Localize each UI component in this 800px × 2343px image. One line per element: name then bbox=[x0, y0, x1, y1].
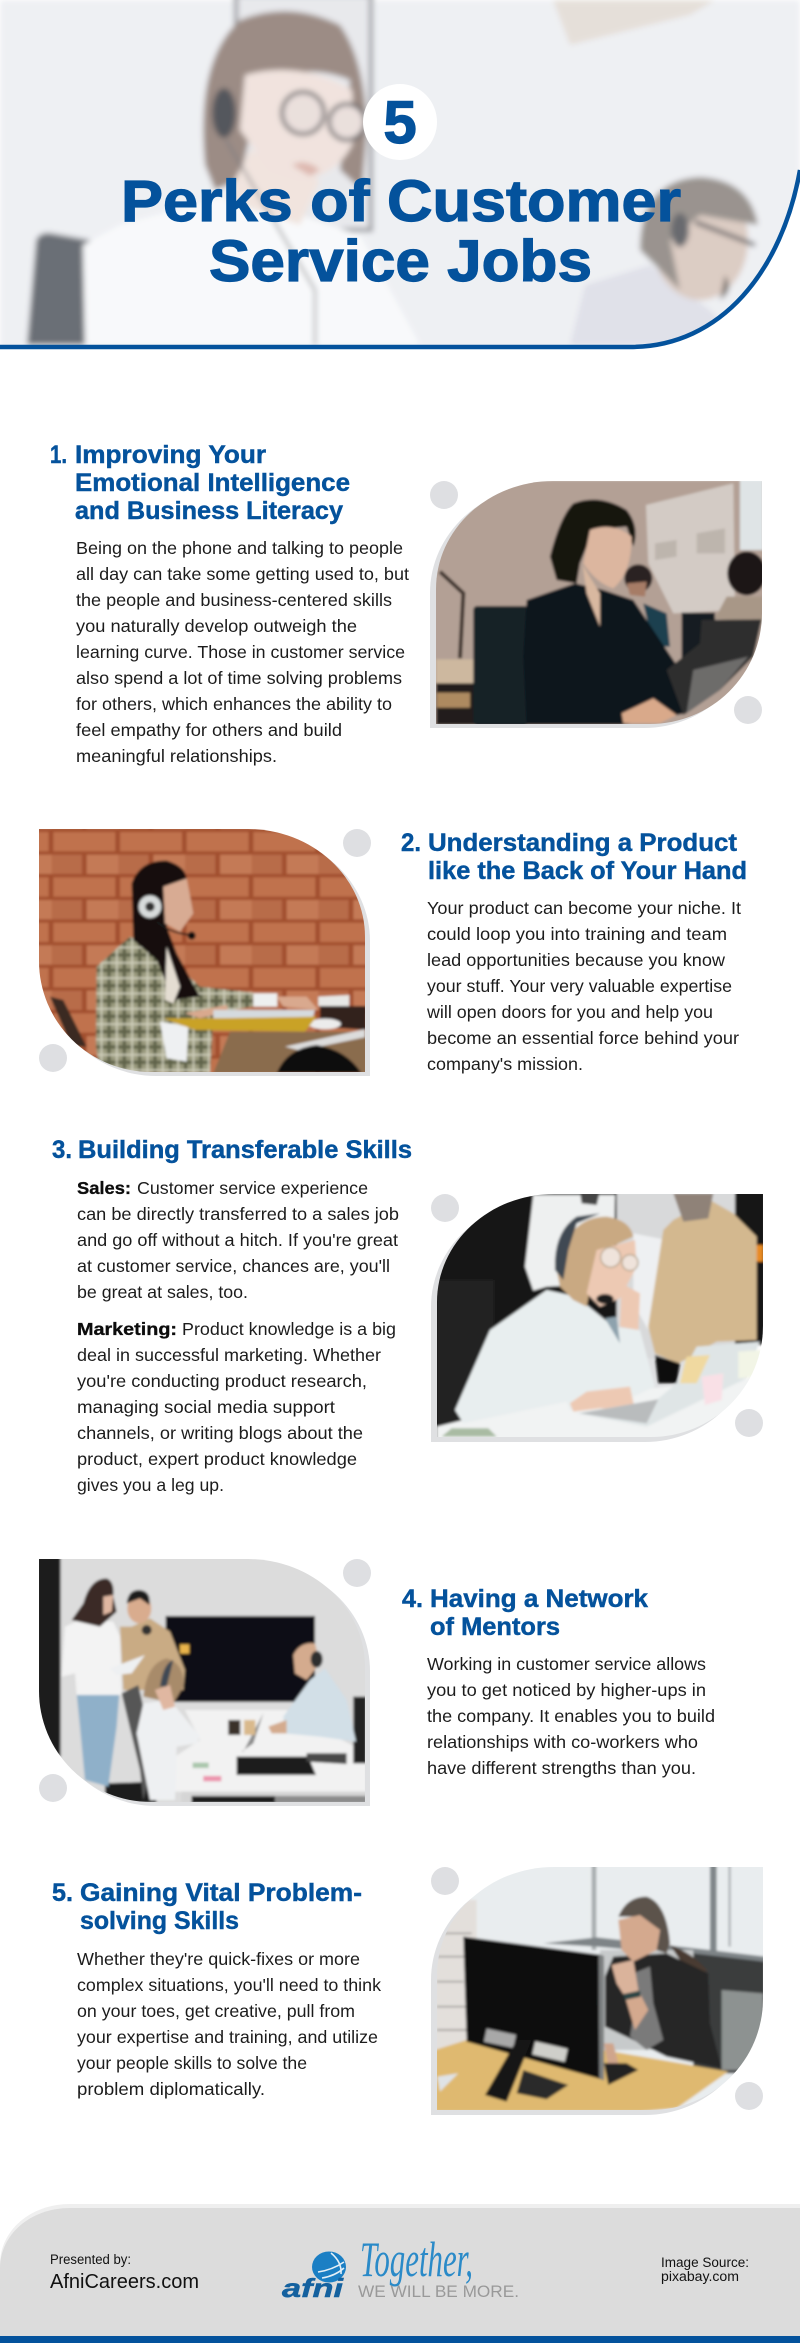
decorative dots bbox=[430, 481, 762, 724]
photo 1: agent at laptop bbox=[430, 480, 767, 728]
body text: marketing: gives you a leg up. bbox=[77, 1475, 224, 1495]
body text 2: will open doors for you and help you bbox=[426, 1002, 713, 1022]
photo 5: agent at monitor bbox=[431, 1863, 767, 2115]
globe mark bbox=[312, 2252, 346, 2282]
body text 4: you to get noticed by higher-ups in bbox=[427, 1680, 706, 1700]
image source: pixabay.com bbox=[661, 2269, 739, 2284]
number badge: 5 bbox=[383, 89, 417, 156]
image source bbox=[661, 2255, 749, 2284]
body text: sales: be great at sales, too. bbox=[77, 1282, 248, 1302]
heading 4: Having a Network bbox=[430, 1585, 648, 1613]
body text 4: the company. It enables you to build bbox=[427, 1706, 715, 1726]
body text: sales bbox=[77, 1178, 399, 1302]
section 5 bbox=[52, 1863, 767, 2115]
body text 2: Your product can become your niche. It bbox=[427, 898, 741, 918]
heading 5: 5. bbox=[52, 1879, 73, 1907]
presented by bbox=[50, 2252, 199, 2293]
body text 1: also spend a lot of time solving problems bbox=[76, 668, 402, 688]
decorative dots bbox=[431, 1867, 763, 2110]
heading 2: Understanding a Product bbox=[428, 829, 738, 857]
body text 1: meaningful relationships. bbox=[76, 746, 277, 766]
heading 1: and Business Literacy bbox=[75, 497, 343, 525]
body text: marketing: Product knowledge is a big bbox=[182, 1319, 396, 1339]
heading 5: solving Skills bbox=[80, 1907, 239, 1935]
heading 1: 1. bbox=[50, 441, 67, 469]
photo 2: agent at brick wall bbox=[33, 827, 371, 1077]
body text: marketing: managing social media support bbox=[77, 1397, 335, 1417]
footer bbox=[0, 2204, 800, 2343]
body text 1: feel empathy for others and build bbox=[76, 720, 342, 740]
body text 2: could loop you into training and team bbox=[427, 924, 727, 944]
section 2 bbox=[33, 827, 747, 1077]
presented by: AfniCareers.com bbox=[50, 2271, 199, 2293]
afni logo: Together, bbox=[360, 2231, 473, 2287]
body text 5 bbox=[77, 1949, 381, 2099]
body text 1: for others, which enhances the ability to bbox=[76, 694, 392, 714]
body text 2: company's mission. bbox=[427, 1054, 583, 1074]
heading 5: Gaining Vital Problem- bbox=[80, 1879, 362, 1907]
image source: Image Source: bbox=[661, 2255, 749, 2270]
section 1 bbox=[50, 441, 767, 766]
body text 5: on your toes, get creative, pull from bbox=[77, 2001, 355, 2021]
body text 4: Working in customer service allows bbox=[427, 1654, 706, 1674]
number badge bbox=[363, 84, 437, 160]
body text 5: Whether they're quick-fixes or more bbox=[77, 1949, 360, 1969]
decorative dots bbox=[431, 1194, 763, 1437]
body text 1: you naturally develop outweigh the bbox=[76, 616, 357, 636]
heading 4: of Mentors bbox=[430, 1613, 560, 1641]
body text 5: your people skills to solve the bbox=[77, 2053, 307, 2073]
body text 1: all day can take some getting used to, but bbox=[76, 564, 409, 584]
body text 1: the people and business-centered skills bbox=[76, 590, 392, 610]
body text 2: become an essential force behind your bbox=[427, 1028, 739, 1048]
body text 1: Being on the phone and talking to people bbox=[76, 538, 403, 558]
body text 1: learning curve. Those in customer service bbox=[76, 642, 405, 662]
body text: sales: Customer service experience bbox=[137, 1178, 368, 1198]
section 4 bbox=[33, 1557, 715, 1807]
body text: marketing: channels, or writing blogs about the bbox=[77, 1423, 363, 1443]
presented by: Presented by: bbox=[50, 2252, 131, 2267]
body text 1 bbox=[76, 538, 409, 766]
heading 1: Improving Your bbox=[75, 441, 266, 469]
photo 3: agent in white shirt bbox=[431, 1192, 765, 1447]
footer panel bbox=[0, 2204, 800, 2343]
heading 3: Building Transferable Skills bbox=[78, 1136, 412, 1164]
heading 1: Emotional Intelligence bbox=[75, 469, 350, 497]
title bbox=[121, 169, 681, 294]
heading 2 bbox=[401, 829, 747, 885]
title: Service Jobs bbox=[209, 229, 592, 294]
body text 2: lead opportunities because you know bbox=[427, 950, 725, 970]
body text 4: relationships with co-workers who bbox=[427, 1732, 698, 1752]
body text 2: your stuff. Your very valuable expertise bbox=[427, 976, 732, 996]
body text 2 bbox=[426, 898, 741, 1074]
heading 4: 4. bbox=[402, 1585, 423, 1613]
body text: marketing: Marketing: bbox=[77, 1319, 177, 1339]
body text: marketing: you're conducting product research, bbox=[77, 1371, 367, 1391]
body text: sales: at customer service, chances are, you'll bbox=[77, 1256, 390, 1276]
heading 4 bbox=[402, 1585, 648, 1641]
afni logo: afni bbox=[282, 2273, 344, 2303]
afni logo: WE WILL BE MORE. bbox=[358, 2282, 519, 2301]
heading 2: like the Back of Your Hand bbox=[428, 857, 747, 885]
heading 1 bbox=[50, 441, 350, 525]
decorative dots bbox=[39, 1559, 371, 1802]
heading 3: 3. bbox=[52, 1136, 72, 1164]
body text 5: your expertise and training, and utilize bbox=[77, 2027, 378, 2047]
curved blue rule bbox=[0, 170, 800, 347]
body text: sales: can be directly transferred to a sales job bbox=[77, 1204, 399, 1224]
body text 4 bbox=[427, 1654, 715, 1778]
afni logo bbox=[282, 2231, 519, 2303]
section 3 bbox=[52, 1136, 765, 1495]
title: Perks of Customer bbox=[121, 169, 681, 234]
body text 5: complex situations, you'll need to think bbox=[77, 1975, 381, 1995]
body text: sales: and go off without a hitch. If you're great bbox=[77, 1230, 398, 1250]
heading 2: 2. bbox=[401, 829, 421, 857]
header banner bbox=[0, 0, 800, 350]
body text: marketing bbox=[77, 1319, 396, 1495]
body text: sales: Sales: bbox=[77, 1178, 131, 1198]
photo 4: team meeting bbox=[33, 1557, 371, 1807]
decorative dots bbox=[39, 829, 371, 1072]
body text: marketing: deal in successful marketing. Whether bbox=[77, 1345, 381, 1365]
body text: marketing: product, expert product knowledge bbox=[77, 1449, 357, 1469]
body text 5: problem diplomatically. bbox=[77, 2079, 265, 2099]
heading 5 bbox=[52, 1879, 362, 1935]
body text 4: have different strengths than you. bbox=[427, 1758, 696, 1778]
